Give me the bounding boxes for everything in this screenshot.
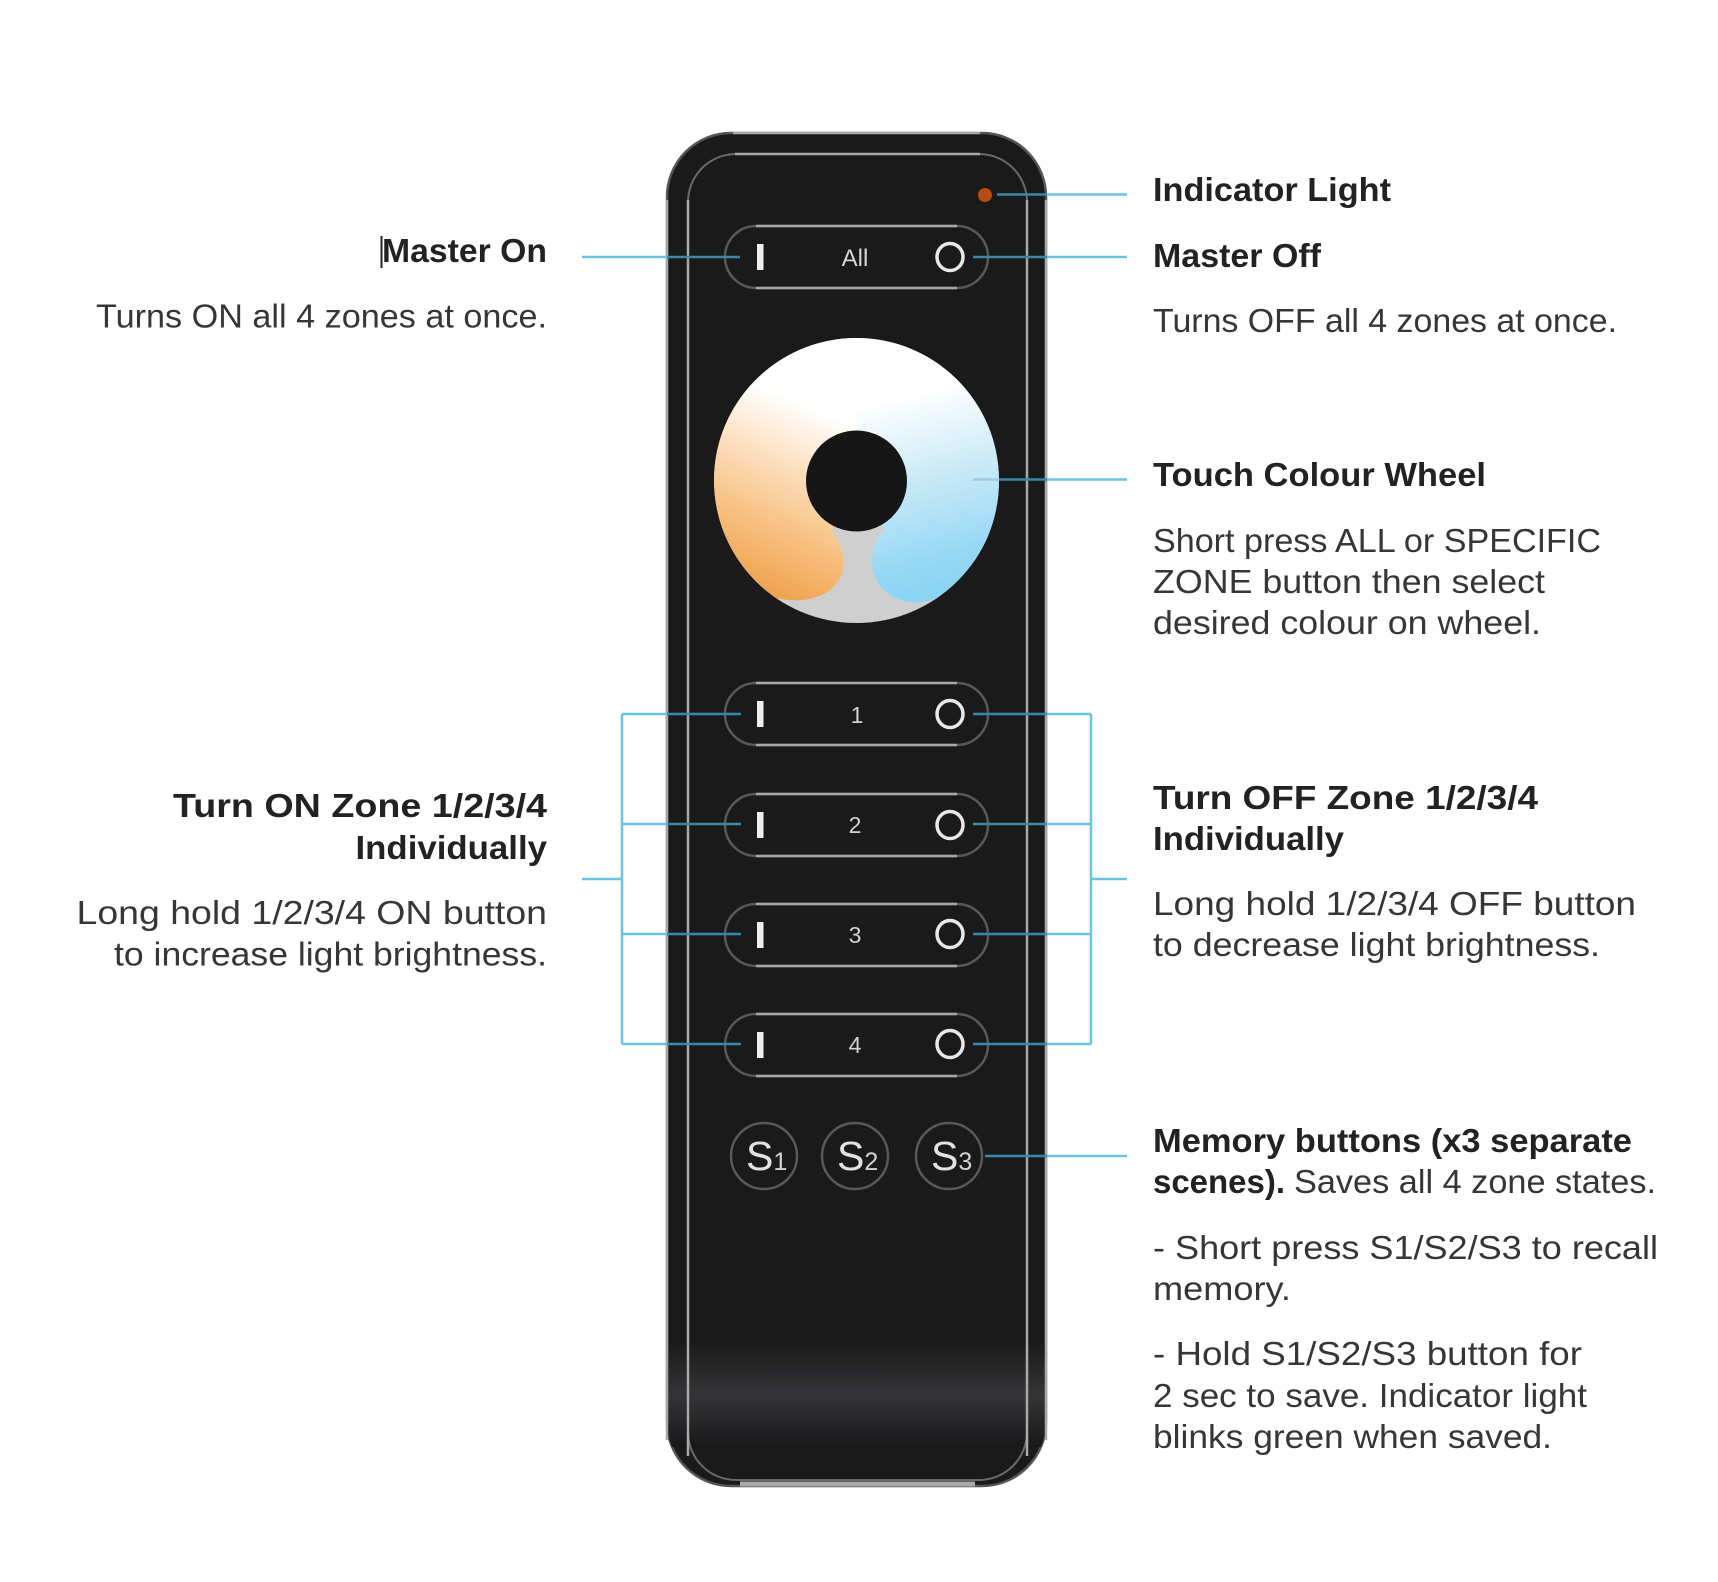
memory button S3: S3 <box>931 1133 972 1179</box>
text: memory buttons: Memory buttons (x3 separate <box>1153 1122 1632 1159</box>
text: zone on: Turn ON Zone 1/2/3/4 <box>173 787 548 824</box>
text: zone on: Individually <box>356 829 548 866</box>
zone 1 button: 1 <box>851 702 863 728</box>
text: memory buttons: - Hold S1/S2/S3 button for <box>1153 1335 1582 1372</box>
zone 3 button <box>725 904 988 966</box>
text: zone off: to decrease light brightness. <box>1153 926 1600 963</box>
text: zone on <box>76 787 548 972</box>
bracket: zone off lines <box>973 714 1127 1044</box>
indicator light <box>978 188 992 202</box>
callout line: colour wheel <box>973 478 1127 481</box>
text: touch colour wheel <box>1153 456 1601 641</box>
text: memory buttons: - Short press S1/S2/S3 to recall <box>1153 1229 1658 1266</box>
memory button S1 <box>731 1123 797 1189</box>
callout line: master off <box>973 256 1127 258</box>
zone 3 button: 3 <box>849 922 861 948</box>
text: zone on: Long hold 1/2/3/4 ON button <box>76 894 547 931</box>
memory button S2 <box>822 1123 888 1189</box>
text: memory buttons: 2 sec to save. Indicator light <box>1153 1377 1587 1414</box>
text: zone off: Individually <box>1153 820 1345 857</box>
text: master off <box>1153 237 1617 339</box>
button: all zones <box>725 226 988 288</box>
callout line: memory buttons <box>985 1155 1127 1157</box>
text: zone on: to increase light brightness. <box>114 936 547 972</box>
text: memory buttons: scenes). <box>1153 1163 1285 1200</box>
memory button S2: S2 <box>837 1133 878 1179</box>
button: all zones: All <box>842 245 868 272</box>
text: zone off: Turn OFF Zone 1/2/3/4 <box>1153 779 1539 816</box>
text: touch colour wheel: Short press ALL or SPECIFIC <box>1153 522 1601 559</box>
zone 1 button <box>725 683 988 745</box>
text: touch colour wheel: ZONE button then select <box>1153 563 1545 600</box>
text: master on <box>96 232 547 334</box>
text: indicator light: Indicator Light <box>1153 171 1391 208</box>
text: zone off <box>1153 779 1636 963</box>
text: master on: Turns ON all 4 zones at once. <box>96 298 547 334</box>
text: master on: Master On <box>382 232 547 269</box>
zone 2 button <box>725 794 988 856</box>
bracket: zone on lines <box>582 714 741 1044</box>
zone 4 button <box>725 1014 988 1076</box>
memory button S3 <box>916 1123 982 1189</box>
text: memory buttons: memory. <box>1153 1270 1291 1307</box>
callout line: indicator light <box>997 193 1127 196</box>
text: master off: Master Off <box>1153 237 1322 274</box>
text: memory buttons: blinks green when saved. <box>1153 1418 1552 1455</box>
zone 4 button: 4 <box>849 1032 862 1058</box>
text: touch colour wheel: Touch Colour Wheel <box>1153 456 1486 493</box>
text: memory buttons: Saves all 4 zone states. <box>1294 1163 1656 1200</box>
text: memory buttons <box>1153 1122 1658 1455</box>
callout line: master on <box>582 256 740 258</box>
text: zone off: Long hold 1/2/3/4 OFF button <box>1153 885 1636 922</box>
remote control body <box>667 133 1046 1486</box>
zone 2 button: 2 <box>849 812 861 838</box>
text: master off: Turns OFF all 4 zones at once. <box>1153 302 1617 339</box>
touch colour wheel <box>714 338 999 623</box>
memory button S1: S1 <box>746 1133 787 1179</box>
text: touch colour wheel: desired colour on wheel. <box>1153 604 1541 641</box>
